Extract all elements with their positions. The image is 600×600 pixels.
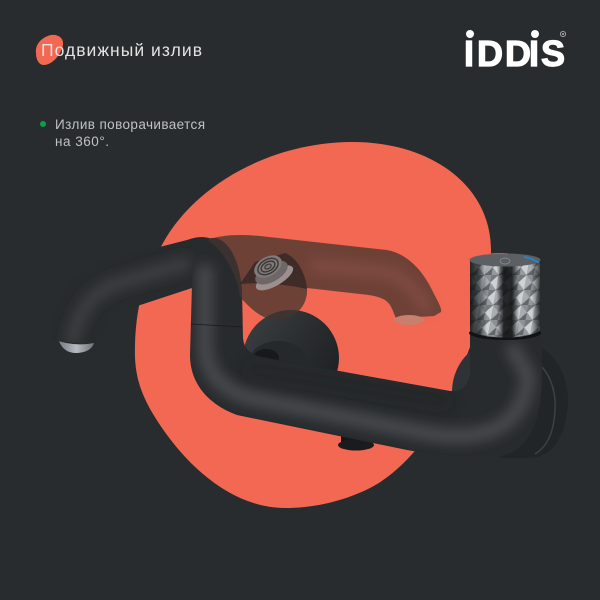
spout aerator [59,341,94,353]
flange nut [249,341,307,383]
green bullet [40,121,46,127]
description: на 360°. [55,134,109,149]
coral blob behind faucet [135,142,491,508]
bullet text block [40,117,205,149]
dark spout: front position [59,237,210,353]
dark ball behind aerator [240,253,307,289]
outlet nipple under pipe [338,432,374,450]
logo: IDDIS: IDDIS [464,33,565,74]
ghost spout: rotated position [207,235,441,325]
title: Подвижный излив [41,40,202,60]
power icon [500,258,510,264]
description: Излив поворачивается [55,117,205,132]
ghost aerator tip [394,315,424,325]
diamond-cut handle [470,254,540,338]
infographic canvas [36,30,566,508]
centre wall flange [243,310,339,406]
right wall flange [452,345,568,458]
main body pipe [190,238,542,457]
handle top cap [470,254,540,266]
small coral accent behind title [36,35,63,65]
ghost aerator: ribbed outlet [245,248,297,295]
hot and cold marks [489,252,508,255]
handle collar separator [469,326,541,340]
